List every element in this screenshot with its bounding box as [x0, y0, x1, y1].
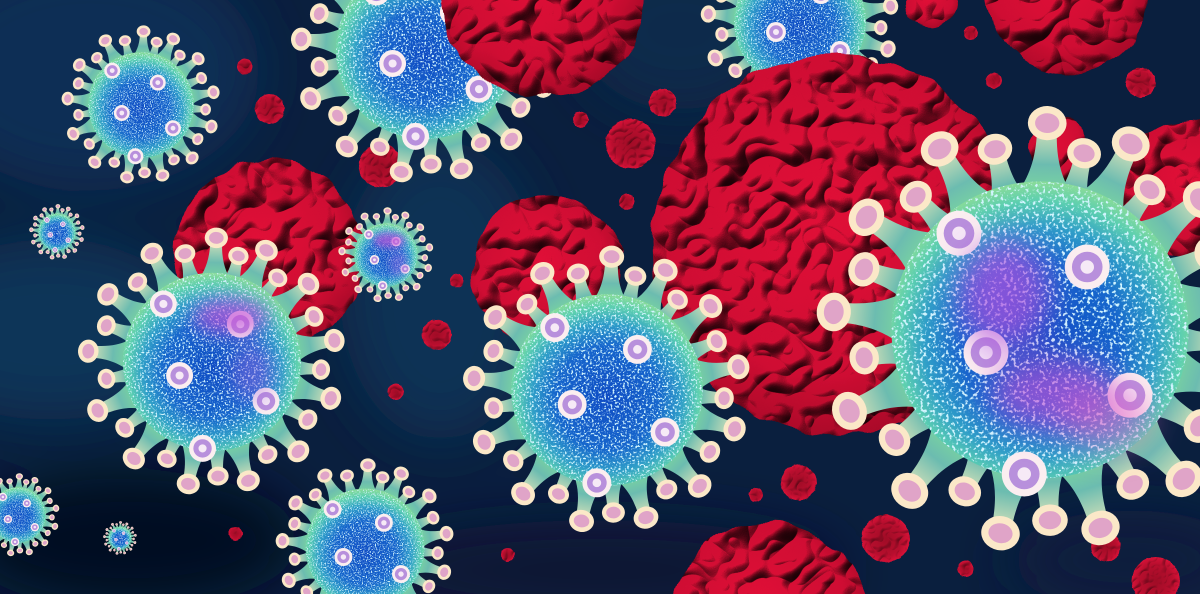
- virus: top centre-right, behind large cell: [699, 0, 901, 123]
- small red cells: [228, 25, 1179, 594]
- virus: bottom centre-left: [275, 458, 456, 594]
- virus: largest, right: [814, 105, 1200, 556]
- virus: top left: [61, 25, 222, 186]
- virus: tiny bottom: [103, 521, 137, 555]
- virus: small purple: [338, 207, 434, 303]
- virus: top centre: [289, 0, 561, 186]
- virus: middle left: [76, 227, 348, 498]
- virus: tiny left: [29, 204, 85, 260]
- virus: bottom left edge: [0, 473, 60, 557]
- virus: centre: [461, 245, 753, 536]
